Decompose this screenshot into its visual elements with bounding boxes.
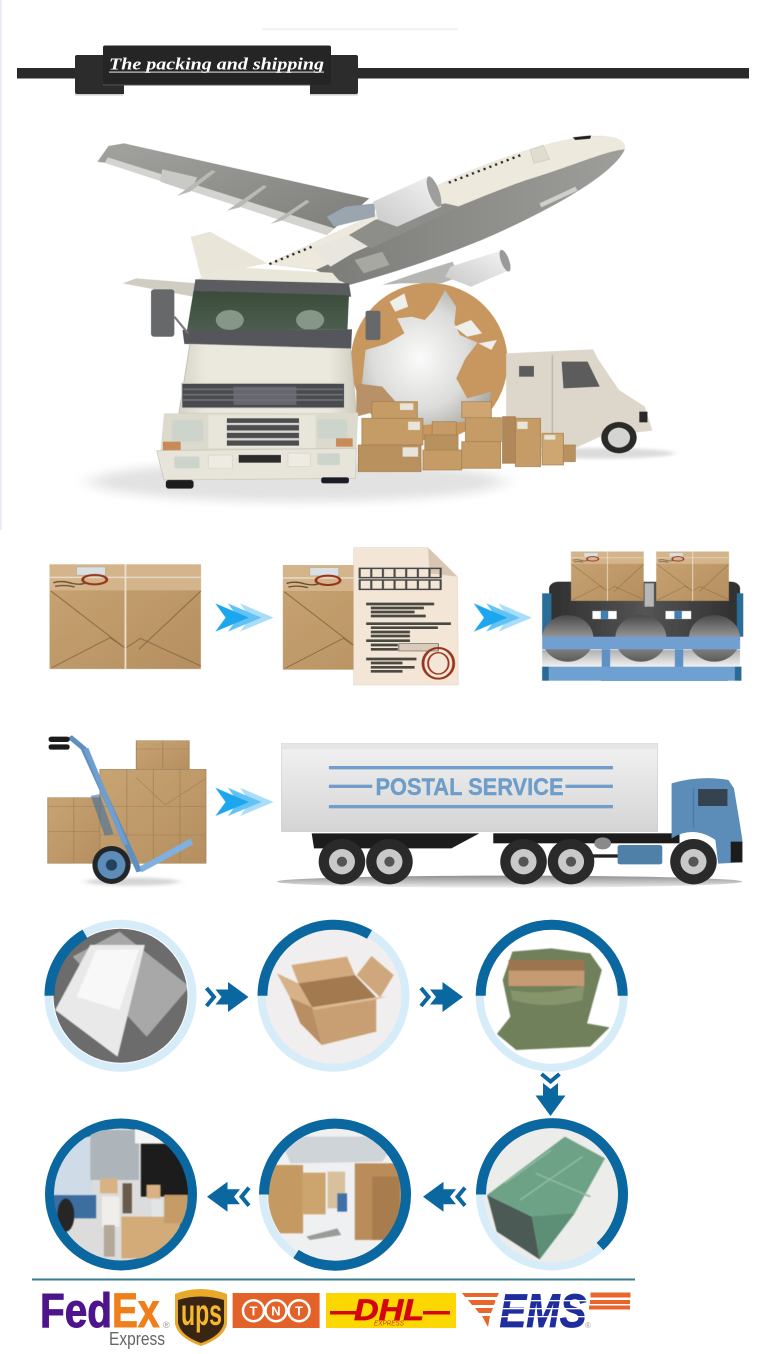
logo: EMS: ®: [585, 1321, 591, 1330]
circle 2: cardboard box: [262, 924, 406, 1068]
parcel icon: [50, 564, 201, 669]
hero illustration: plane, truck, globe, boxes and van: [90, 135, 674, 502]
circle 5: warehouse: [263, 1122, 407, 1266]
blue arrows 2: [474, 603, 532, 632]
globe: [351, 283, 508, 440]
logo: UPS shield: [175, 1289, 227, 1346]
blue arrows 1: [215, 603, 274, 632]
arrow 5 left: [207, 1182, 249, 1212]
logo: DHL Express: [326, 1293, 456, 1328]
logo: FedEx Express: [40, 1285, 170, 1349]
process step row 2: trolley with boxes, postal truck: [48, 737, 742, 888]
cardboard boxes: [358, 402, 575, 472]
logo: UPS shield: ups: [181, 1292, 222, 1333]
logo: TNT: N: [271, 1304, 281, 1318]
van: [506, 349, 652, 453]
truck lettering: POSTAL SERVICE: [376, 774, 564, 801]
arrow 2: [421, 982, 463, 1012]
logo: FedEx Express: ®: [163, 1320, 170, 1330]
parcel with document: [283, 548, 458, 685]
blue arrows 3: [215, 788, 274, 816]
title text: The packing and shipping: [109, 54, 325, 74]
header ribbon: The packing and shipping: [17, 46, 749, 96]
arrow 3 down: [536, 1074, 566, 1116]
airplane: [97, 135, 625, 297]
arrow 4 left: [423, 1182, 465, 1212]
arrow 1: [206, 982, 248, 1012]
logo: FedEx Express: Express: [109, 1329, 165, 1349]
conveyor machine with parcels: [542, 552, 743, 681]
logo: TNT: T: [250, 1304, 258, 1318]
stacked boxes: [48, 741, 206, 863]
logo: FedEx Express: Fed: [40, 1285, 112, 1338]
semi truck front: [151, 267, 380, 489]
circle 1: clear plastic bags: [48, 924, 192, 1068]
divider rule: [32, 1278, 635, 1280]
logo: TNT: [233, 1293, 320, 1328]
logo: TNT: T: [295, 1304, 303, 1318]
logo: DHL Express: DHL: [354, 1294, 424, 1327]
hand trolley: [49, 737, 193, 886]
logo: FedEx Express: Ex: [112, 1285, 160, 1338]
circle 4: wrapped green package: [480, 1122, 624, 1266]
logo: EMS: EMS: [500, 1284, 586, 1337]
logo: DHL Express: EXPRESS: [374, 1320, 404, 1328]
logo: EMS: [462, 1284, 630, 1337]
circle 3: woven bag with box: [480, 924, 624, 1068]
postal truck: [277, 743, 742, 888]
process step row 1: parcel, documents, conveyor: [50, 548, 743, 685]
circle 6: loading a truck: [49, 1124, 192, 1266]
courier logos: [40, 1284, 630, 1349]
